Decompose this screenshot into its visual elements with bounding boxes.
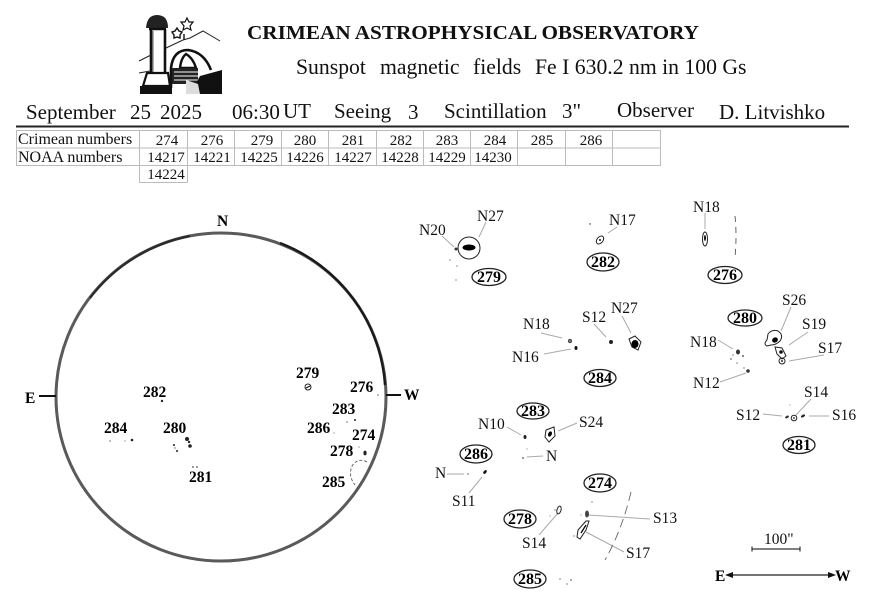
observation details row: Observer <box>617 98 694 122</box>
group 283: S24 <box>579 414 603 431</box>
table: active region numbers: 14217 <box>147 150 185 166</box>
panel: full solar disk: W <box>404 387 420 404</box>
group 284: S12 <box>582 309 606 326</box>
group 279: N20 <box>419 222 446 239</box>
group 279: N27 <box>477 208 504 225</box>
subtitle: Fe I 630.2 nm in 100 Gs <box>535 55 746 79</box>
table: active region numbers: 14227 <box>334 150 372 166</box>
table: active region numbers: 14225 <box>240 150 278 166</box>
observation details row: 25 <box>130 100 151 124</box>
title: CRIMEAN ASTROPHYSICAL OBSERVATORY <box>247 22 699 44</box>
group 283: 283 <box>521 403 545 420</box>
observation details row: 3 <box>408 100 418 124</box>
panel: full solar disk: 280 <box>163 420 186 437</box>
group 282: 282 <box>591 254 615 271</box>
table: active region numbers: 279 <box>251 133 273 149</box>
subtitle: magnetic <box>380 55 460 79</box>
observation details row: D. Litvishko <box>719 100 825 124</box>
group 281: S14 <box>804 384 828 401</box>
table: active region numbers: 285 <box>531 133 553 149</box>
table: active region numbers: 281 <box>342 133 364 149</box>
group 280 <box>690 292 842 392</box>
group 274 <box>573 474 677 562</box>
group 284: N16 <box>512 349 539 366</box>
group 280: S17 <box>818 340 842 357</box>
table: active region numbers: 14229 <box>428 150 466 166</box>
table: active region numbers: 14221 <box>193 150 231 166</box>
group 284: N18 <box>523 316 550 333</box>
scale bar: 100 arcsec <box>752 531 800 552</box>
panel: full solar disk: 276 <box>350 379 374 396</box>
table: active region numbers: 284 <box>484 133 507 149</box>
group 279: 279 <box>477 269 501 286</box>
panel: full solar disk: E <box>25 390 35 407</box>
panel: full solar disk <box>25 213 420 561</box>
group 286: S11 <box>452 493 476 510</box>
panel: full solar disk: 278 <box>330 443 354 460</box>
group 279 <box>419 208 506 286</box>
group 281: S16 <box>832 407 856 424</box>
table: active region numbers: 274 <box>156 133 179 149</box>
table: active region numbers: 14228 <box>381 150 419 166</box>
group 274: S13 <box>653 510 677 527</box>
observation details row: UT <box>283 99 311 123</box>
table: active region numbers: 282 <box>390 133 412 149</box>
group 274: S17 <box>626 545 650 562</box>
table: active region numbers: 283 <box>436 133 458 149</box>
group 286: N <box>435 465 446 482</box>
table: active region numbers <box>16 130 660 183</box>
group 280: 280 <box>733 310 757 327</box>
group 284: 284 <box>588 370 612 387</box>
table: active region numbers: 14224 <box>147 167 185 183</box>
panel: full solar disk: N <box>217 213 228 230</box>
panel: full solar disk: 279 <box>296 365 320 382</box>
group 281 <box>736 384 856 454</box>
table: active region numbers: 280 <box>294 133 316 149</box>
table: active region numbers: 286 <box>580 133 603 149</box>
observation details row: 2025 <box>160 100 202 124</box>
group 280: N12 <box>693 375 720 392</box>
table: active region numbers: 276 <box>201 133 224 149</box>
group 286 <box>435 445 492 510</box>
group 283: N <box>546 448 557 465</box>
group 281: S12 <box>736 407 760 424</box>
group 283: N10 <box>478 416 505 433</box>
icon: observatory logo <box>139 15 222 94</box>
group 280: S26 <box>782 292 806 309</box>
observation details row <box>26 98 825 124</box>
group 274: 274 <box>588 475 612 492</box>
scale bar: 100 arcsec: 100" <box>764 531 794 548</box>
group 276: N18 <box>693 199 720 216</box>
panel: full solar disk: 283 <box>332 401 356 418</box>
observation details row: Scintillation <box>444 99 547 123</box>
panel: full solar disk: 285 <box>322 474 346 491</box>
group 278: 278 <box>508 511 532 528</box>
observation details row: 06:30 <box>232 100 280 124</box>
group 285 <box>514 570 572 588</box>
table: active region numbers: NOAA numbers <box>18 149 122 166</box>
group 276 <box>693 199 742 284</box>
subtitle: Sunspot <box>296 55 366 79</box>
subtitle: fields <box>473 55 521 79</box>
panel: full solar disk: 284 <box>104 420 128 437</box>
table: active region numbers: 14226 <box>286 150 324 166</box>
observation details row: September <box>26 100 116 124</box>
arrow: east-west direction: E <box>715 568 725 585</box>
panel: full solar disk: 281 <box>189 469 212 486</box>
group 285: 285 <box>518 571 542 588</box>
arrow: east-west direction <box>715 568 851 585</box>
observation details row: 3" <box>562 99 581 123</box>
group 281: 281 <box>787 437 811 454</box>
panel: full solar disk: 274 <box>352 427 376 444</box>
group 280: N18 <box>690 334 717 351</box>
group 282: N17 <box>609 212 636 229</box>
arrow: east-west direction: W <box>835 568 851 585</box>
group 276: 276 <box>713 267 737 284</box>
group 282 <box>587 212 636 271</box>
group 280: S19 <box>802 316 826 333</box>
group 278: S14 <box>522 535 546 552</box>
observation details row: Seeing <box>334 99 392 123</box>
panel: full solar disk: 282 <box>143 384 166 401</box>
group 278 <box>504 506 562 552</box>
panel: full solar disk: 286 <box>307 420 330 437</box>
table: active region numbers: 14230 <box>474 150 512 166</box>
group 286: 286 <box>464 446 488 463</box>
subtitle <box>296 55 746 79</box>
group 284 <box>512 300 641 387</box>
group 284: N27 <box>611 300 638 317</box>
group 283 <box>478 403 603 465</box>
table: active region numbers: Crimean numbers <box>18 131 132 148</box>
